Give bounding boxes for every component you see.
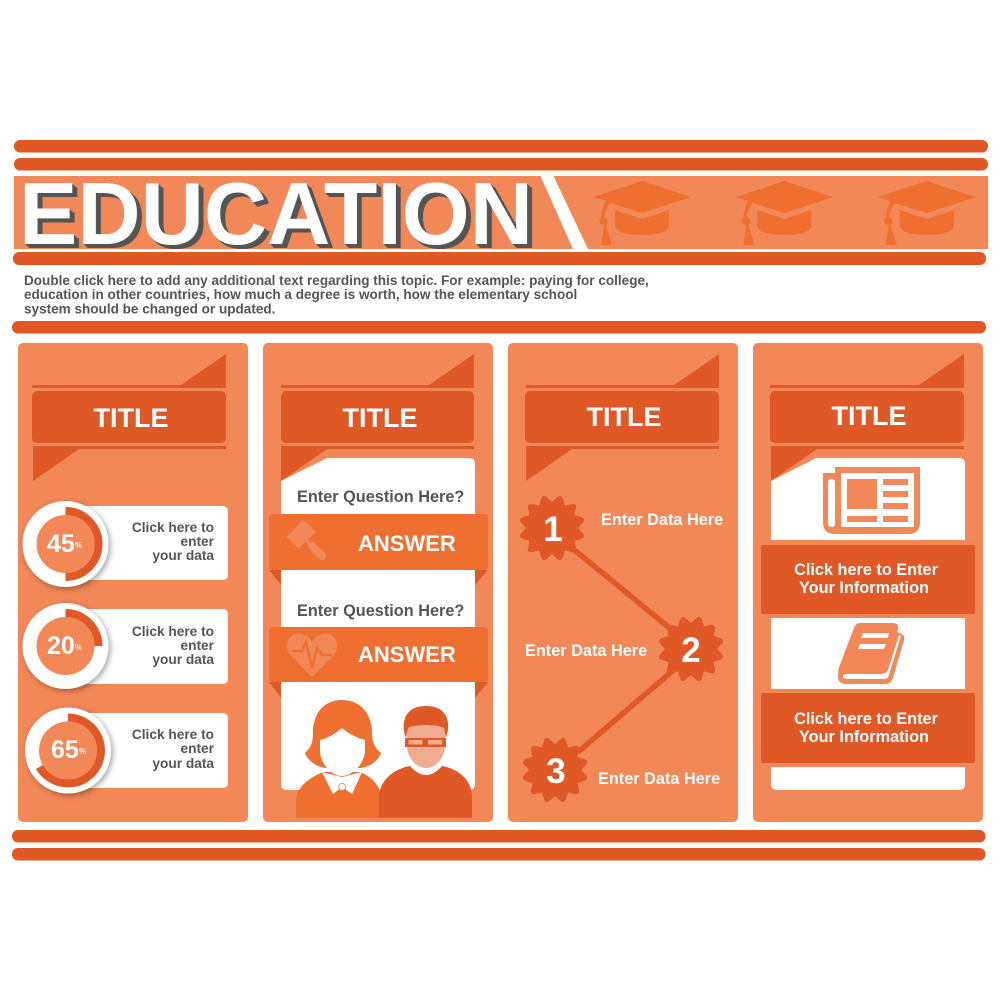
headline: EDUCATION: [19, 164, 533, 263]
title ribbon: [525, 354, 719, 481]
data row: 20%: enter: [181, 638, 215, 653]
icon: woman: [296, 700, 382, 818]
step 1: 1: [543, 510, 563, 549]
data row: 45%: 45: [47, 530, 75, 558]
title ribbon: TITLE: [342, 403, 418, 433]
stripe under intro: [12, 321, 986, 334]
data row: 20%: %: [75, 643, 82, 652]
step 3: [526, 741, 720, 799]
answer ribbon 2: [269, 627, 488, 698]
data row: 45%: enter: [181, 534, 215, 549]
white sheet: [281, 458, 475, 790]
data row: 45%: Click here to: [132, 520, 214, 535]
title ribbon: [281, 354, 474, 481]
icon: man: [379, 706, 472, 818]
icon: book: [838, 623, 904, 684]
intro text: education in other countries, how much a degree is worth, how the elementary school: [24, 287, 577, 302]
icon: heart: [287, 634, 337, 677]
info box 1: [761, 545, 975, 614]
intro text: Double click here to add any additional text regarding this topic. For example: paying for college,: [24, 273, 649, 288]
step 3: Enter Data Here: [598, 770, 720, 788]
data row: 45%: your data: [152, 548, 214, 563]
data row: 65%: your data: [152, 756, 214, 771]
step 2: 2: [681, 631, 701, 670]
data row: 65%: %: [79, 747, 86, 756]
panel: information: [753, 343, 983, 822]
title ribbon: TITLE: [832, 401, 906, 431]
step 2: Enter Data Here: [525, 642, 647, 660]
data row: 65%: [25, 708, 228, 794]
data row: 65%: 65: [51, 736, 79, 764]
data row: 65%: Click here to: [132, 727, 214, 742]
step 1: Enter Data Here: [601, 511, 723, 529]
title ribbon: [32, 354, 226, 481]
top stripes: [14, 140, 988, 170]
panel: questions and answers: [263, 343, 493, 822]
intro text: system should be changed or updated.: [24, 302, 275, 316]
info box 2: Your Information: [799, 728, 929, 746]
answer ribbon 2: ANSWER: [358, 642, 456, 667]
title ribbon: TITLE: [586, 402, 662, 432]
panel: percentages: [18, 343, 248, 822]
question 2: Enter Question Here?: [297, 602, 464, 620]
info box 1: Your Information: [799, 579, 929, 597]
answer ribbon 1: ANSWER: [358, 531, 456, 556]
stripe under banner: [13, 252, 986, 265]
banner: [14, 175, 988, 249]
info box 2: [761, 693, 975, 763]
bottom stripes: [12, 830, 986, 860]
icon: newspaper: [823, 467, 920, 534]
step 2: [525, 620, 720, 678]
data row: 20%: 20: [47, 632, 75, 660]
intro text: [24, 273, 649, 316]
connector lines: [572, 548, 676, 752]
info box 2: Click here to Enter: [794, 710, 939, 728]
data row: 20%: your data: [152, 652, 214, 667]
title ribbon: [770, 354, 964, 481]
data row: 65%: enter: [181, 741, 215, 756]
white sheets: [771, 458, 965, 790]
title ribbon: TITLE: [94, 403, 168, 433]
data row: 20%: Click here to: [132, 624, 214, 639]
answer ribbon 1: [269, 514, 488, 585]
icon: gavel: [288, 521, 322, 556]
step 1: [523, 499, 723, 557]
info box 1: Click here to Enter: [794, 561, 939, 579]
data row: 45%: [22, 501, 228, 587]
data row: 20%: [22, 603, 228, 689]
data row: 45%: %: [75, 541, 82, 550]
panel: numbered steps: [508, 343, 738, 822]
question 1: Enter Question Here?: [297, 488, 464, 506]
step 3: 3: [546, 752, 566, 791]
icon: graduation caps: [593, 181, 976, 245]
